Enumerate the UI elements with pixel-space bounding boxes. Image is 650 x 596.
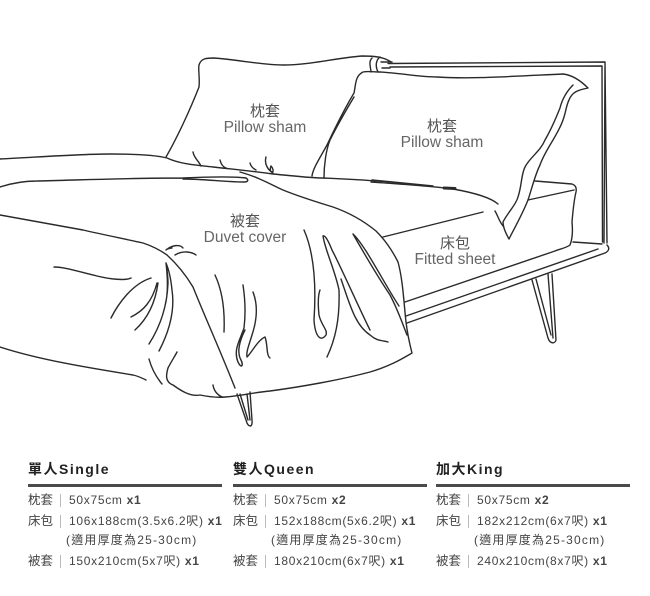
row: fitted sheet: [436, 514, 608, 528]
row: duvet cover: [233, 554, 405, 568]
row: pillow sham: [28, 493, 141, 507]
row: fitted sheet: 床包: [28, 514, 53, 528]
size column: king: [436, 461, 630, 568]
size column: single: 106x188cm(3.5x6.2呎) x1: [69, 514, 222, 528]
row: pillow sham: [436, 493, 549, 507]
size column: single: [28, 461, 222, 568]
heading: king: 加大King: [436, 461, 504, 477]
label: fitted sheet: [414, 235, 496, 268]
label: right pillow sham: [401, 118, 483, 151]
size column: queen: 180x210cm(6x7呎) x1: [274, 554, 405, 568]
row: thickness note: (適用厚度為25-30cm): [271, 533, 402, 547]
left pillow: [166, 56, 392, 173]
row: fitted sheet: [233, 514, 416, 528]
row: duvet cover: [436, 554, 608, 568]
row: pillow sham: 枕套: [28, 493, 53, 507]
label: fitted sheet: 床包: [440, 235, 470, 252]
row: fitted sheet: 床包: [233, 514, 258, 528]
size column: king: 240x210cm(8x7呎) x1: [477, 554, 608, 568]
row: thickness note: (適用厚度為25-30cm): [474, 533, 605, 547]
row: pillow sham: [233, 493, 346, 507]
row: pillow sham: 枕套: [233, 493, 258, 507]
label: left pillow sham: 枕套: [250, 103, 280, 120]
label: duvet cover: Duvet cover: [204, 229, 286, 246]
label: left pillow sham: [224, 103, 306, 136]
duvet cover: [0, 154, 412, 397]
size column: single: 50x75cm x1: [69, 493, 141, 507]
row: fitted sheet: [28, 514, 222, 528]
size column: queen: 152x188cm(5x6.2呎) x1: [274, 514, 416, 528]
row: fitted sheet: 床包: [436, 514, 461, 528]
right pillow: [312, 72, 588, 239]
size column: single: 150x210cm(5x7呎) x1: [69, 554, 200, 568]
size column: king: 50x75cm x2: [477, 493, 549, 507]
row: duvet cover: 被套: [28, 554, 53, 568]
fitted sheet: [383, 181, 602, 302]
headboard: [388, 62, 607, 243]
label: fitted sheet: Fitted sheet: [414, 251, 496, 268]
row: duvet cover: 被套: [233, 554, 258, 568]
bed illustration: [0, 55, 610, 427]
label: duvet cover: 被套: [230, 213, 260, 230]
size column: king: 182x212cm(6x7呎) x1: [477, 514, 608, 528]
row: thickness note: (適用厚度為25-30cm): [66, 533, 197, 547]
size column: queen: 50x75cm x2: [274, 493, 346, 507]
label: right pillow sham: Pillow sham: [401, 134, 483, 151]
label: right pillow sham: 枕套: [427, 118, 457, 135]
label: duvet cover: [204, 213, 286, 246]
row: pillow sham: 枕套: [436, 493, 461, 507]
row: duvet cover: [28, 554, 200, 568]
heading: queen: 雙人Queen: [233, 461, 315, 477]
row: duvet cover: 被套: [436, 554, 461, 568]
bed frame and legs: [406, 245, 609, 343]
heading: single: 單人Single: [28, 461, 110, 477]
label: left pillow sham: Pillow sham: [224, 119, 306, 136]
size column: queen: [233, 461, 427, 568]
